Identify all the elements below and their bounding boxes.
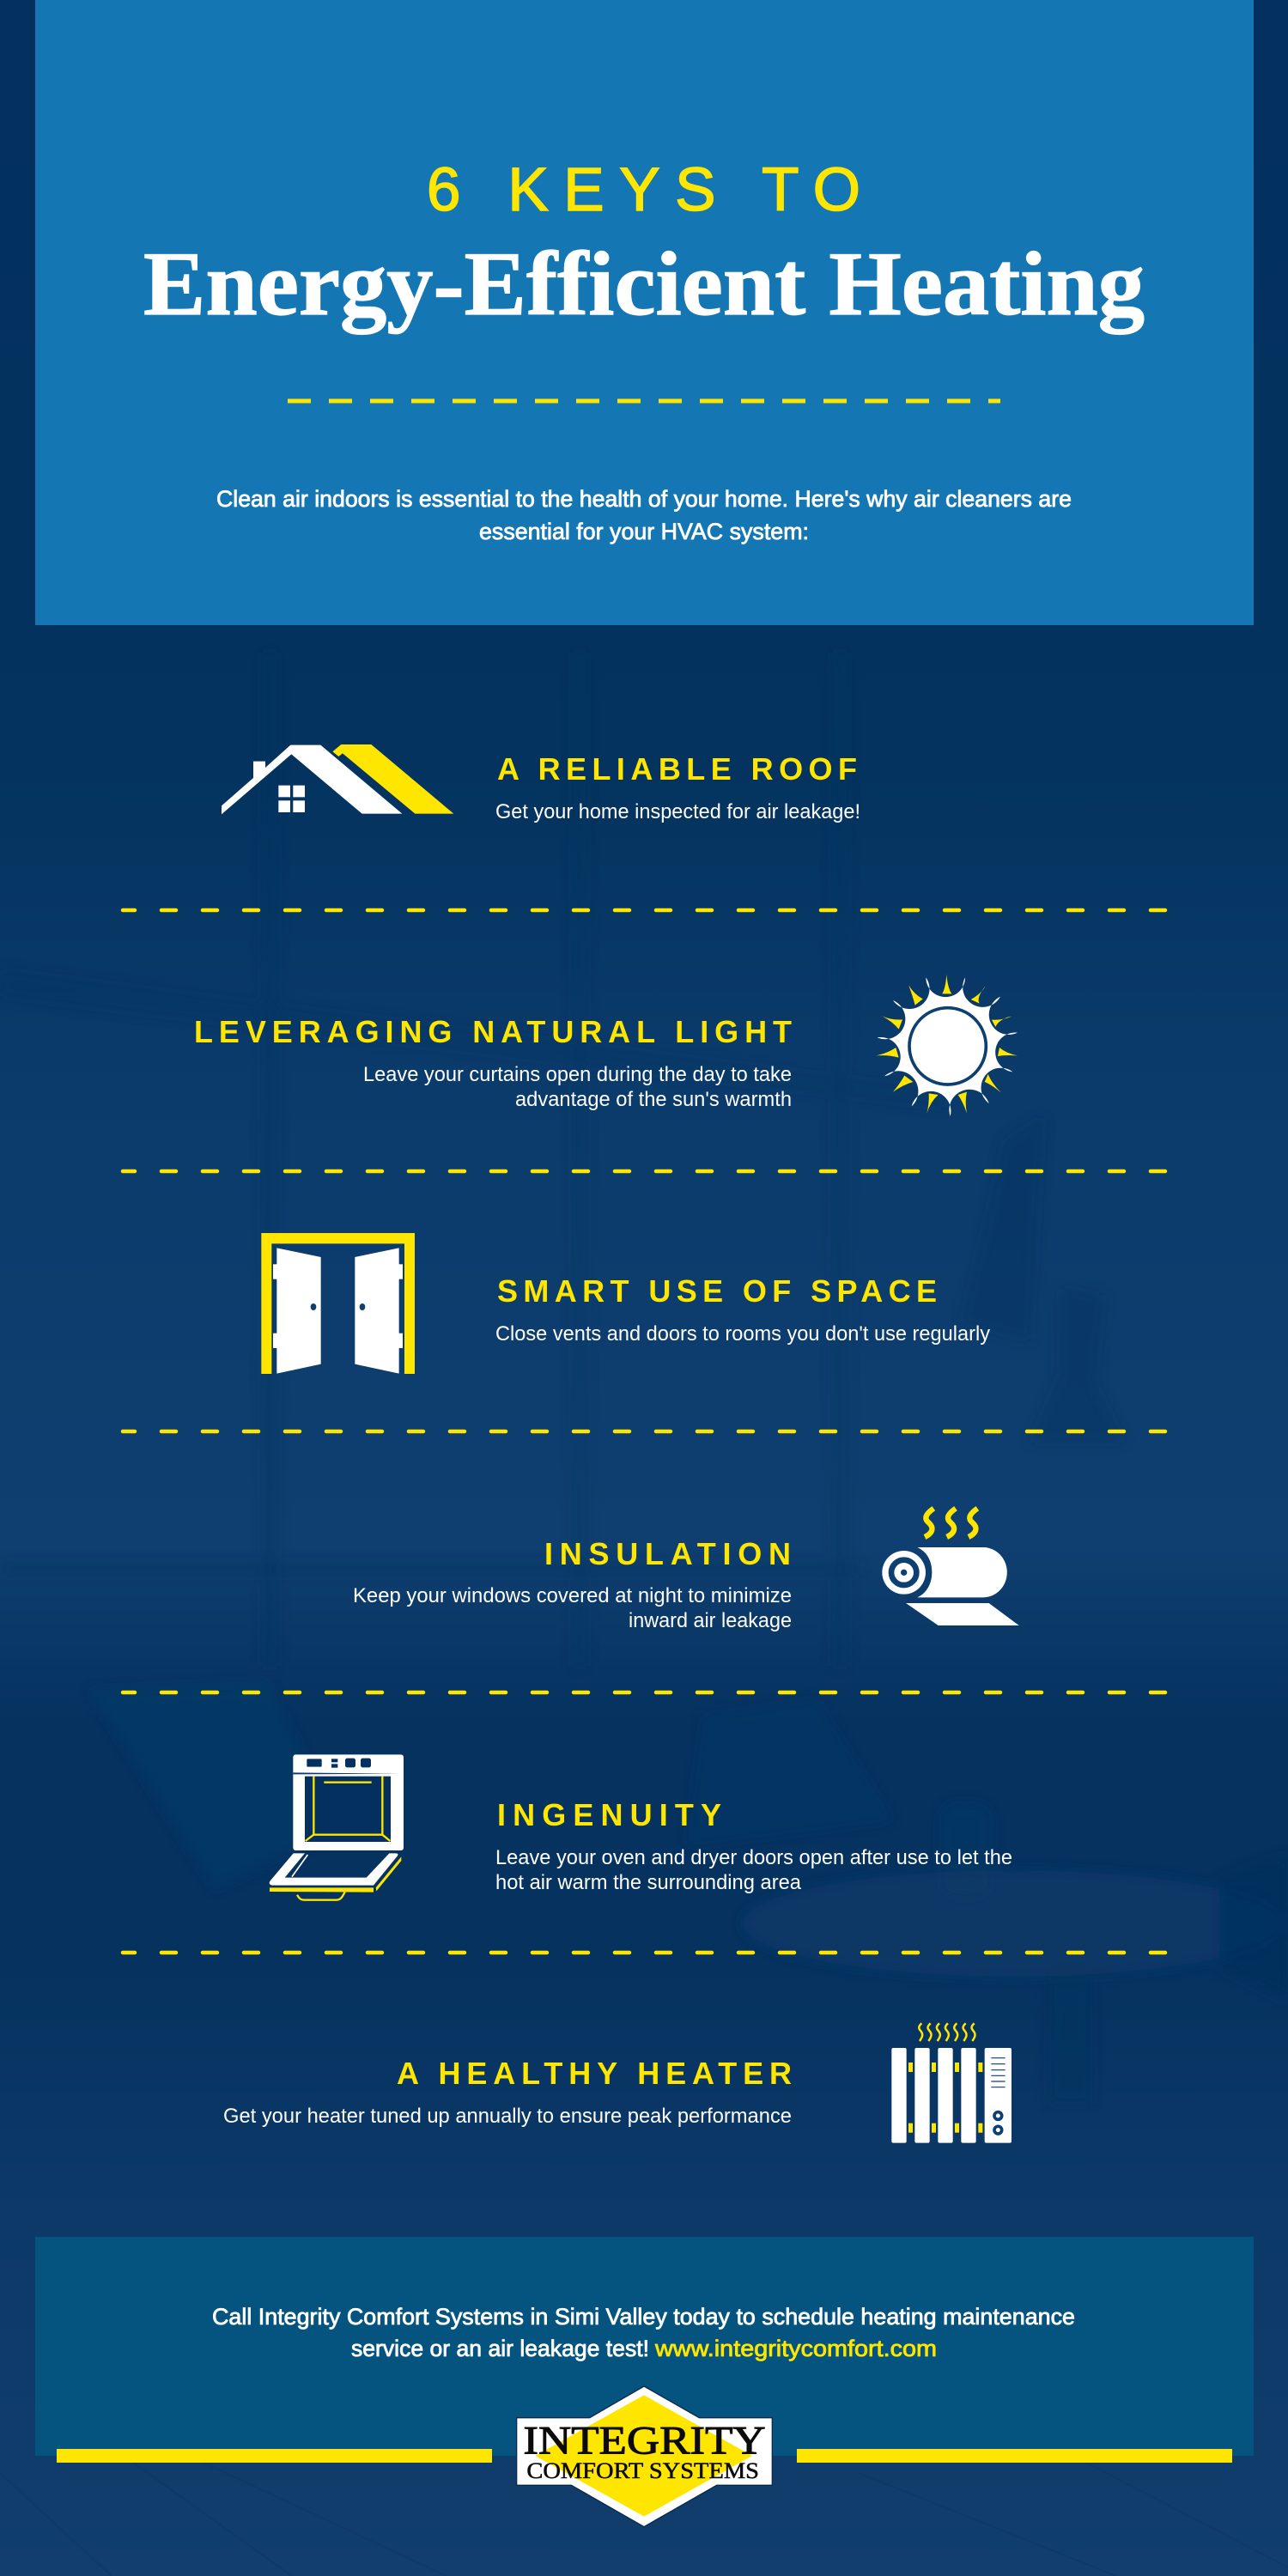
logo: integrity comfort systems (517, 2386, 772, 2527)
description: natural light: advantage of the sun's warmth (515, 1088, 792, 1111)
call to action text: www.integritycomfort.com (654, 2336, 937, 2361)
divider 5 (123, 1951, 1165, 1954)
header dashed divider (288, 398, 1000, 404)
intro text: essential for your HVAC system: (479, 519, 809, 544)
icon: open oven (270, 1754, 404, 1900)
description: natural light: Leave your curtains open during the day to take (363, 1063, 792, 1086)
description: heater: Get your heater tuned up annually to ensure peak performance (223, 2105, 792, 2128)
call to action text: Call Integrity Comfort Systems in Simi Valley today to schedule heating maintenance (212, 2304, 1075, 2330)
heading: 6 keys to: 6 KEYS TO (427, 156, 860, 224)
divider 2 (123, 1170, 1165, 1173)
description: roof: Get your home inspected for air leakage! (495, 800, 860, 823)
left yellow bar (57, 2449, 492, 2463)
description: space: Close vents and doors to rooms you don't use regularly (495, 1322, 991, 1346)
key 5: ingenuity (270, 1754, 1012, 1900)
icon: double doors (261, 1233, 415, 1374)
panel: header (35, 0, 1254, 625)
description: insulation: inward air leakage (629, 1609, 792, 1632)
title: Energy-Efficient Heating (143, 234, 1145, 334)
key 2: leveraging natural light (194, 975, 1018, 1116)
icon: roof (222, 744, 453, 814)
icon: sun (877, 975, 1018, 1116)
key 6: a healthy heater (223, 2023, 1012, 2143)
heading: smart use of space: SMART USE OF SPACE (497, 1273, 937, 1309)
panel: call to action (35, 2237, 1254, 2463)
call to action text (212, 2304, 1075, 2361)
description: ingenuity: hot air warm the surrounding area (495, 1871, 801, 1894)
intro text: Clean air indoors is essential to the health of your home. Here's why air cleaners are (216, 486, 1072, 512)
heading: insulation: INSULATION (544, 1536, 791, 1571)
logo: integrity comfort systems: INTEGRITY (523, 2418, 766, 2463)
description: insulation (353, 1584, 792, 1632)
heading: leveraging natural light: LEVERAGING NATURAL LIGHT (194, 1014, 792, 1049)
key 3: smart use of space (261, 1233, 991, 1374)
key 4: insulation (353, 1509, 1019, 1632)
key 1: a reliable roof (222, 744, 860, 823)
heading: ingenuity: INGENUITY (497, 1797, 721, 1832)
description: ingenuity: Leave your oven and dryer doors open after use to let the (495, 1846, 1012, 1869)
description: insulation: Keep your windows covered at night to minimize (353, 1584, 792, 1607)
description: natural light (363, 1063, 792, 1111)
call to action text: service or an air leakage test! (351, 2336, 649, 2361)
heading: a reliable roof: A RELIABLE ROOF (497, 751, 857, 787)
logo: integrity comfort systems: COMFORT SYSTEMS (526, 2458, 759, 2483)
divider 1 (123, 908, 1165, 912)
icon: insulation roll (882, 1509, 1019, 1625)
divider 4 (123, 1691, 1165, 1694)
intro text (216, 486, 1072, 544)
heading: a healthy heater: A HEALTHY HEATER (397, 2056, 792, 2091)
divider 3 (123, 1430, 1165, 1433)
icon: radiator (891, 2023, 1012, 2143)
right yellow bar (797, 2449, 1232, 2463)
description: ingenuity (495, 1846, 1012, 1894)
